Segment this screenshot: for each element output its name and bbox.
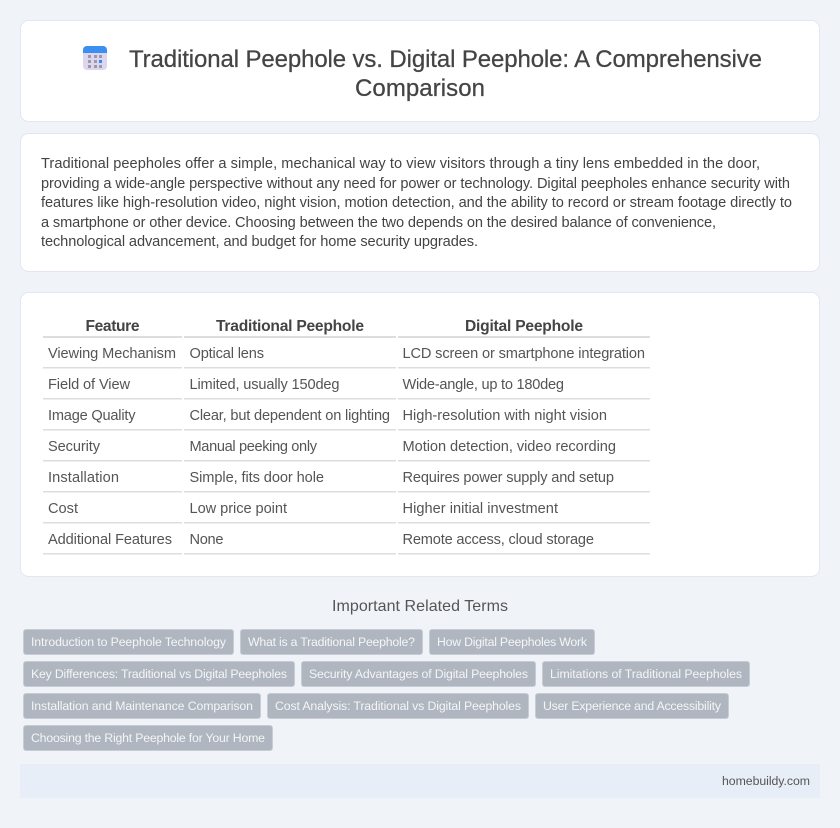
title: Comparison bbox=[355, 75, 485, 102]
row: installation: Requires power supply and setup bbox=[402, 470, 614, 486]
table header bbox=[86, 318, 583, 335]
row: installation: Simple, fits door hole bbox=[190, 470, 324, 486]
panel: introduction text: features like high-resolution video, night vision, motion detection, and the ability to record or stream footage directly to bbox=[41, 195, 792, 211]
row: field of view: Limited, usually 150deg bbox=[190, 377, 340, 393]
row: cost: Low price point bbox=[190, 501, 287, 517]
row: image quality bbox=[48, 408, 607, 424]
related terms tags: Choosing the Right Peephole for Your Home bbox=[31, 731, 265, 745]
related terms tags: User Experience and Accessibility bbox=[543, 699, 722, 713]
row: viewing mechanism bbox=[48, 346, 645, 362]
heading: related terms: Important Related Terms bbox=[332, 598, 508, 615]
row: additional features: Additional Features bbox=[48, 532, 172, 548]
panel: introduction text bbox=[20, 134, 820, 272]
footer bbox=[20, 764, 820, 798]
panel: comparison table bbox=[20, 292, 820, 576]
related terms tags bbox=[24, 630, 750, 750]
row: cost: Higher initial investment bbox=[402, 501, 558, 517]
icon: calendar bbox=[83, 46, 107, 70]
related terms tags: Limitations of Traditional Peepholes bbox=[550, 667, 742, 681]
related terms tags: Installation and Maintenance Comparison bbox=[31, 699, 253, 713]
row: installation: Installation bbox=[48, 470, 119, 486]
table header: Digital Peephole bbox=[465, 318, 583, 335]
row: image quality: Image Quality bbox=[48, 408, 136, 424]
row: additional features: Remote access, cloud storage bbox=[402, 532, 594, 548]
table header: Feature bbox=[86, 318, 140, 335]
row: additional features bbox=[48, 532, 594, 548]
row: security: Motion detection, video recording bbox=[402, 439, 616, 455]
row: field of view bbox=[48, 377, 564, 393]
row: security: Manual peeking only bbox=[190, 439, 318, 455]
row: image quality: Clear, but dependent on lighting bbox=[190, 408, 390, 424]
panel: introduction text: technological advancement, and budget for home security upgrades. bbox=[41, 234, 478, 250]
row: field of view: Wide-angle, up to 180deg bbox=[402, 377, 564, 393]
row: cost: Cost bbox=[48, 501, 78, 517]
title bbox=[129, 46, 762, 102]
row: field of view: Field of View bbox=[48, 377, 130, 393]
panel: introduction text: Traditional peepholes offer a simple, mechanical way to view visitors through a tiny lens embedded in the door, bbox=[41, 156, 760, 172]
row: security: Security bbox=[48, 439, 101, 455]
row: additional features: None bbox=[190, 532, 224, 548]
related terms tags: Cost Analysis: Traditional vs Digital Peepholes bbox=[275, 699, 521, 713]
related terms tags: Introduction to Peephole Technology bbox=[31, 635, 227, 649]
table header: Traditional Peephole bbox=[216, 318, 364, 335]
related terms tags: Security Advantages of Digital Peepholes bbox=[309, 667, 528, 681]
related terms tags: Key Differences: Traditional vs Digital Peepholes bbox=[31, 667, 287, 681]
related terms tags: What is a Traditional Peephole? bbox=[248, 635, 415, 649]
row: cost bbox=[48, 501, 558, 517]
title: Traditional Peephole vs. Digital Peephole: A Comprehensive bbox=[129, 46, 762, 73]
panel: introduction text: providing a wide-angle perspective without any need for power or technology. Digital peepholes enhance security with bbox=[41, 176, 790, 192]
panel: introduction text: a smartphone or other device. Choosing between the two depends on the desired balance of convenience, bbox=[41, 215, 716, 231]
related terms tags: How Digital Peepholes Work bbox=[437, 635, 588, 649]
row: viewing mechanism: Optical lens bbox=[190, 346, 264, 362]
row: viewing mechanism: LCD screen or smartphone integration bbox=[402, 346, 645, 362]
row: installation bbox=[48, 470, 614, 486]
row: security bbox=[48, 439, 616, 455]
row: viewing mechanism: Viewing Mechanism bbox=[48, 346, 176, 362]
row: image quality: High-resolution with night vision bbox=[402, 408, 607, 424]
footer: homebuildy.com bbox=[722, 774, 810, 788]
panel: header bbox=[20, 20, 820, 122]
